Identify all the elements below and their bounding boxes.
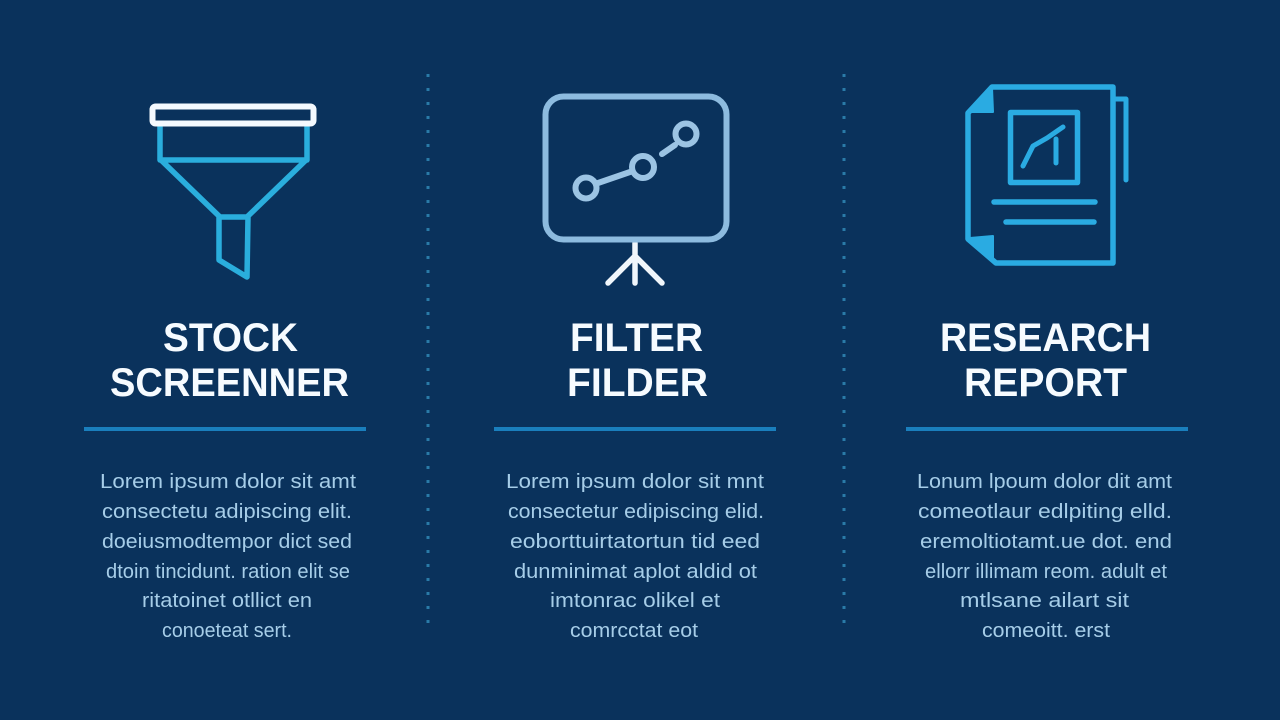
- icon: funnel: [152, 106, 314, 277]
- text block: stock screener: doeiusmodtempor dict sed: [102, 531, 352, 553]
- text block: stock screener: ritatoinet otllict en: [142, 590, 312, 612]
- heading: filter filder: FILTER: [570, 316, 703, 360]
- text block: research report: comeoitt. erst: [982, 620, 1110, 642]
- text block: research report: comeotlaur edlpiting elld.: [918, 501, 1172, 523]
- panel: filter filder: [494, 96, 776, 642]
- text block: filter filder: Lorem ipsum dolor sit mnt: [506, 471, 764, 493]
- text block: stock screener: conoeteat sert.: [162, 620, 292, 642]
- divider: filter filder: [494, 427, 776, 431]
- text block: stock screener: [100, 471, 356, 642]
- text block: filter filder: comrcctat eot: [570, 620, 698, 642]
- text block: research report: eremoltiotamt.ue dot. end: [920, 531, 1172, 553]
- heading: filter filder: [567, 316, 708, 405]
- text block: filter filder: dunminimat aplot aldid ot: [514, 561, 757, 583]
- heading: research report: RESEARCH: [940, 316, 1151, 360]
- text block: research report: Lonum lpoum dolor dit amt: [917, 471, 1172, 493]
- heading: stock screener: STOCK: [163, 316, 298, 360]
- panel: research report: [906, 87, 1188, 642]
- panel: stock screener: [84, 106, 366, 642]
- divider: stock screener: [84, 427, 366, 431]
- divider: research report: [906, 427, 1188, 431]
- text block: filter filder: imtonrac olikel et: [550, 590, 720, 612]
- text block: filter filder: eoborttuirtatortun tid eed: [510, 531, 760, 553]
- heading: research report: [940, 316, 1151, 405]
- text block: stock screener: dtoin tincidunt. ration elit se: [106, 561, 350, 583]
- text block: stock screener: Lorem ipsum dolor sit amt: [100, 471, 356, 493]
- text block: filter filder: [506, 471, 764, 642]
- icon: report document: [968, 87, 1126, 263]
- icon: presentation board with line chart: [546, 96, 726, 283]
- text block: research report: [917, 471, 1172, 642]
- heading: filter filder: FILDER: [567, 361, 708, 405]
- heading: research report: REPORT: [964, 361, 1127, 405]
- text block: research report: ellorr illimam reom. adult et: [925, 561, 1167, 583]
- text block: stock screener: consectetu adipiscing elit.: [102, 501, 352, 523]
- text block: filter filder: consectetur edipiscing elid.: [508, 501, 764, 523]
- heading: stock screener: [110, 316, 349, 405]
- text block: research report: mtlsane ailart sit: [960, 590, 1130, 612]
- heading: stock screener: SCREENNER: [110, 361, 349, 405]
